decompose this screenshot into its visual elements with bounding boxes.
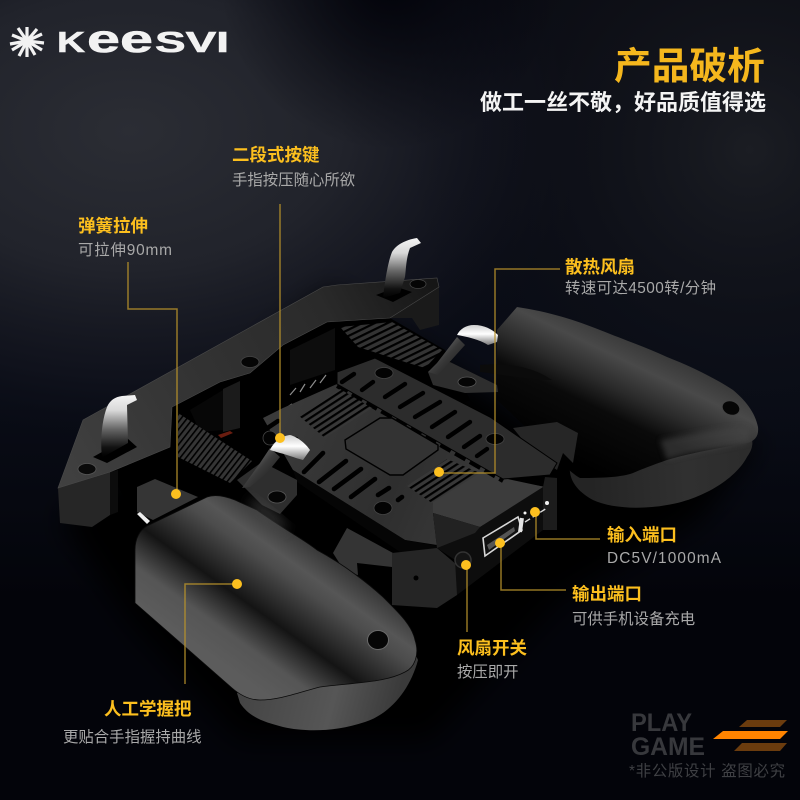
input port <box>524 501 549 522</box>
inner wall right <box>290 328 335 385</box>
right handle upper shell <box>497 307 758 478</box>
lower handle hole <box>368 630 388 650</box>
callout: 二段式按键 <box>232 145 355 443</box>
end box left facet <box>392 548 457 608</box>
heading: 散热风扇 <box>565 257 635 277</box>
right handle hole <box>720 398 742 418</box>
description: 按压即开 <box>457 663 519 681</box>
end box front face <box>433 487 543 595</box>
device shadow <box>60 290 760 740</box>
logo wordmark: SVI <box>155 27 229 59</box>
leader line <box>279 204 281 437</box>
spring arm panel <box>137 479 198 520</box>
red accent <box>218 431 233 438</box>
lever A <box>93 395 137 463</box>
port end top face <box>433 467 545 527</box>
callout: 输入端口 <box>530 507 722 567</box>
top bar right face <box>390 285 439 330</box>
spring white tab <box>137 512 150 524</box>
watermark: play game <box>629 709 788 780</box>
heading: 二段式按键 <box>232 145 320 165</box>
description: 手指按压随心所欲 <box>232 171 355 189</box>
icon: orange stripes <box>713 720 788 751</box>
right handle tip glow <box>660 427 751 460</box>
PLAY GAME text: GAME <box>631 733 705 761</box>
top ribbed band <box>340 322 442 368</box>
end box strip <box>433 513 480 548</box>
lower-left plate <box>333 528 393 575</box>
center octagon panel <box>345 418 438 475</box>
PLAY GAME text: PLAY <box>631 709 692 737</box>
leader line <box>536 513 600 539</box>
top bar hole mid <box>241 356 259 368</box>
lower hole right <box>374 502 392 514</box>
top bar side face <box>58 472 110 527</box>
callout: 散热风扇 <box>434 257 716 477</box>
lower handle crease glow <box>246 495 290 535</box>
fan switch <box>455 552 471 568</box>
spring coil detail <box>283 375 326 410</box>
lever C base plate <box>237 462 297 514</box>
lever C base hole <box>268 491 286 503</box>
deck surface <box>263 384 545 545</box>
dot <box>434 467 444 477</box>
top bar <box>58 278 439 488</box>
notice text: *非公版设计 盗图必究 <box>629 762 785 780</box>
heading: subtitle: 做工一丝不敬，好品质值得选 <box>480 90 766 115</box>
castellated plate <box>337 358 557 479</box>
end box side wing <box>543 477 557 530</box>
castellated front wall <box>337 386 503 481</box>
right handle lower shell <box>570 440 752 508</box>
inner wall left <box>223 381 240 432</box>
cavity <box>110 318 470 525</box>
heading: 风扇开关 <box>457 638 527 658</box>
heading: 弹簧拉伸 <box>78 216 148 236</box>
right wing plate <box>513 422 578 470</box>
callout: 弹簧拉伸 <box>78 216 181 499</box>
top bar hole left <box>78 464 96 474</box>
USB port <box>483 517 524 556</box>
lever D <box>428 325 498 375</box>
description: 更贴合手指握持曲线 <box>63 728 202 746</box>
description: 转速可达4500转/分钟 <box>565 279 716 297</box>
right handle crease <box>480 364 552 380</box>
leader line <box>501 544 566 590</box>
heading: 人工学握把 <box>104 699 192 719</box>
dot <box>232 579 242 589</box>
inner wall dark block <box>190 390 223 432</box>
lower handle <box>135 495 418 730</box>
dot <box>171 489 181 499</box>
logo wordmark <box>57 18 229 61</box>
left ribbed band <box>178 413 252 483</box>
device: gamepad <box>58 238 760 740</box>
heading: title: 产品破析 <box>614 45 765 87</box>
heading: 输出端口 <box>572 584 642 604</box>
end box hole <box>414 576 418 580</box>
logo: keesvi <box>10 18 229 61</box>
center stripes right <box>407 459 480 503</box>
right handle <box>480 307 758 508</box>
dot <box>495 538 505 548</box>
callout: 风扇开关 <box>457 560 527 681</box>
leader line <box>185 584 237 684</box>
dot <box>461 560 471 570</box>
callout: 输出端口 <box>495 538 695 628</box>
top bar hole right <box>410 280 426 288</box>
lever D base hole <box>458 377 476 387</box>
description: 可供手机设备充电 <box>572 610 695 628</box>
lower slots band <box>269 421 402 500</box>
leader line <box>128 262 177 493</box>
lower handle lower shell <box>237 620 418 730</box>
PLAY GAME text <box>631 709 705 761</box>
deck lower edge <box>293 470 437 552</box>
lever D base plate <box>428 362 498 393</box>
description: DC5V/1000mA <box>607 550 722 567</box>
leader line <box>440 269 560 473</box>
callout: 人工学握把 <box>63 579 242 746</box>
castellated slots <box>342 374 487 456</box>
description: 可拉伸90mm <box>78 241 172 259</box>
dot <box>275 433 285 443</box>
lever C <box>242 435 310 488</box>
top bar side inner <box>110 470 118 515</box>
icon: logo sunburst <box>10 27 44 57</box>
logo wordmark: ee <box>87 18 153 61</box>
leader line <box>466 566 468 632</box>
dot <box>530 507 540 517</box>
castellated hole lower <box>486 434 504 444</box>
logo wordmark: K <box>57 27 85 59</box>
lower handle upper shell <box>135 496 417 700</box>
castellated hole upper <box>375 368 393 378</box>
lower hole left <box>263 431 277 445</box>
heading: 输入端口 <box>607 525 677 545</box>
lever B <box>376 238 421 302</box>
center stripes left <box>298 389 372 438</box>
